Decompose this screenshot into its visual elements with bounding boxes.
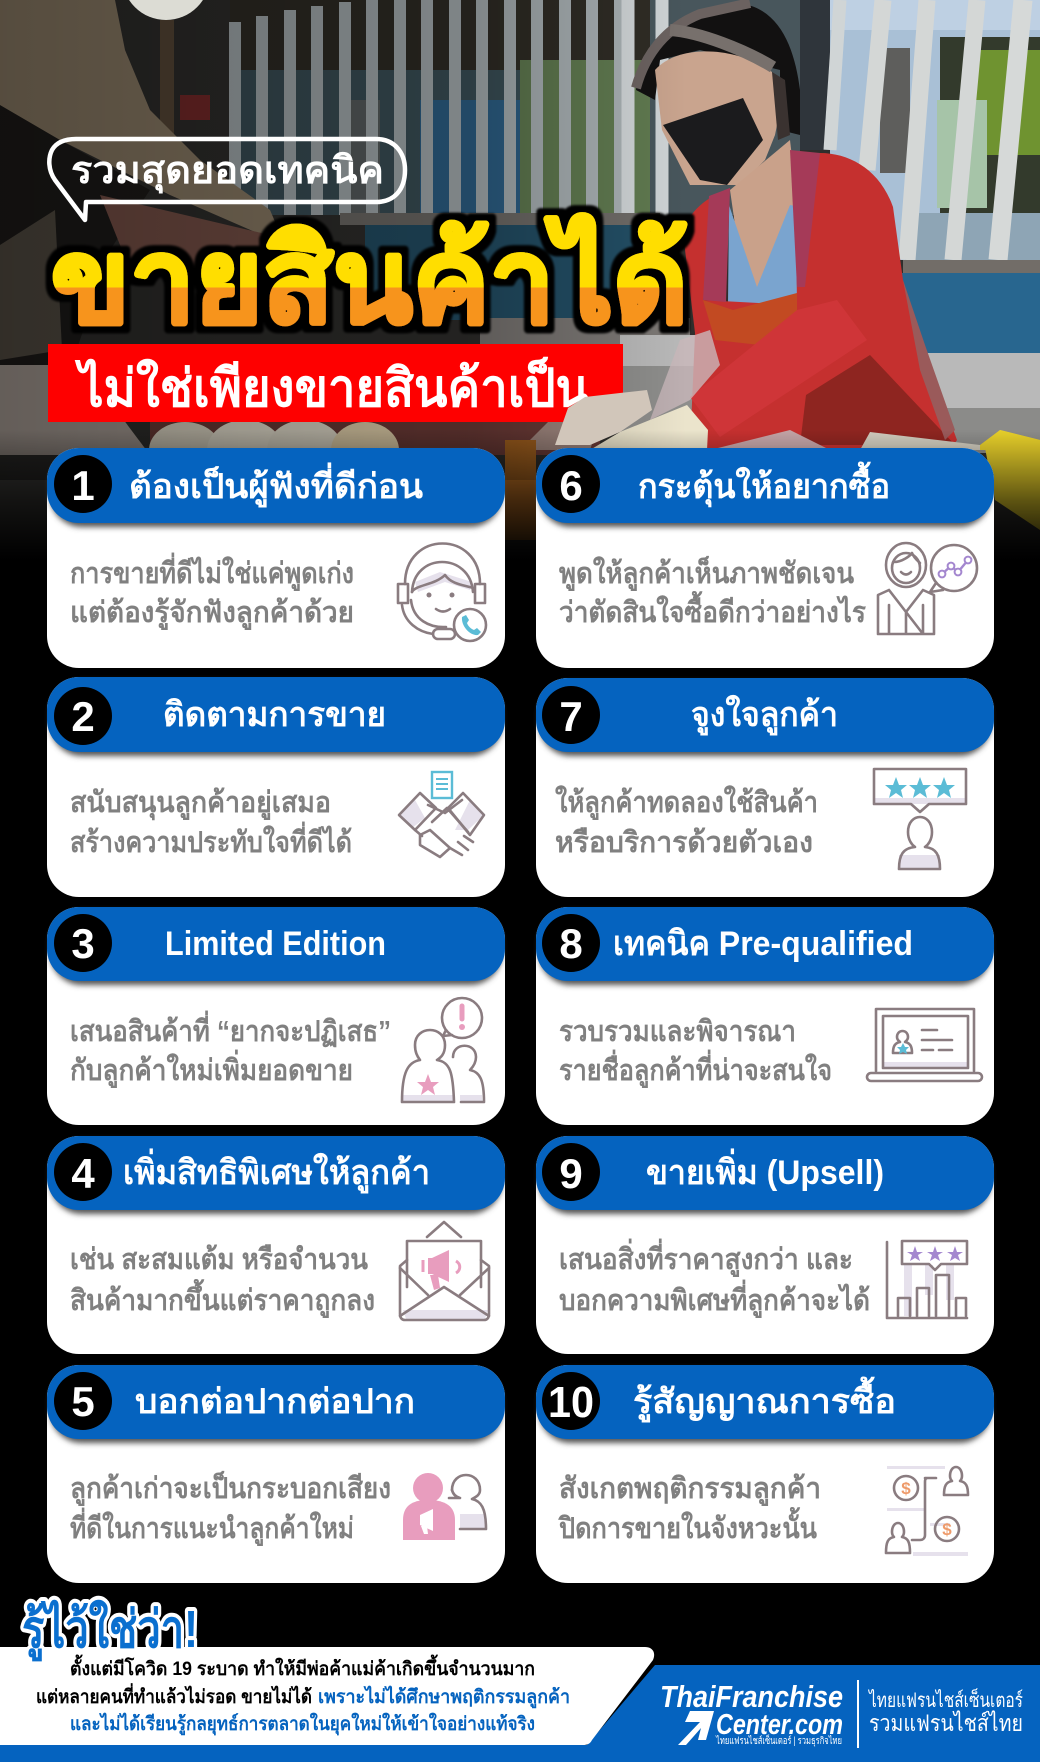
card 9: ขายเพิ่ม (Upsell): [646, 1148, 884, 1192]
card 4: สินค้ามากขึ้นแต่ราคาถูกลง: [70, 1278, 375, 1318]
card 5: [47, 1365, 505, 1583]
card 7: [536, 678, 994, 897]
card 2: สนับสนุนลูกค้าอยู่เสมอ: [70, 787, 331, 820]
card 9: [536, 1136, 994, 1354]
speech bubble heading: รวมสุดยอดเทคนิค: [71, 150, 384, 194]
card 1: [47, 448, 505, 668]
card 4: เพิ่มสิทธิพิเศษให้ลูกค้า: [123, 1148, 430, 1194]
icon: handshake and document: [399, 772, 484, 857]
icon: word of mouth people: [403, 1473, 486, 1540]
card 5: 5: [71, 1378, 95, 1425]
card 1: ต้องเป็นผู้ฟังที่ดีก่อน: [129, 462, 423, 508]
hat and left figure: [0, 0, 295, 370]
icon: customers and money flow: $: [942, 1520, 952, 1539]
card 1: แต่ต้องรู้จักฟังลูกค้าด้วย: [70, 597, 354, 630]
card 1: 1: [71, 462, 95, 509]
card 2: [47, 677, 505, 897]
card 3: เสนอสินค้าที่ “ยากจะปฏิเสธ”: [70, 1010, 391, 1048]
main title: ขายสินค้าได้: [51, 214, 688, 348]
card 5: บอกต่อปากต่อปาก: [135, 1383, 415, 1421]
card 10: รู้สัญญาณการซื้อ: [633, 1376, 896, 1423]
icon: presenter with chart bubble: [878, 543, 977, 634]
card 7: จูงใจลูกค้า: [691, 694, 838, 736]
vendor glove over banner: [555, 390, 652, 445]
card 2: 2: [71, 693, 95, 740]
icon: logo arrow: [678, 1711, 714, 1745]
did-you-know body text: [36, 1654, 570, 1736]
fence slats: [235, 0, 620, 215]
card 10: [536, 1365, 994, 1583]
overlays: [0, 0, 1040, 480]
woman: [520, 3, 1040, 450]
icon: call centre agent: [398, 544, 486, 641]
card 9: บอกความพิเศษที่ลูกค้าจะได้: [559, 1279, 870, 1318]
icon: laptop with customer profile: [867, 1009, 982, 1081]
card 7: 7: [559, 693, 583, 740]
logo ThaiFranchise Center.com: ไทยแฟรนไชส์เซ็นเตอร์ | รวมธุรกิจไทย: [715, 1733, 842, 1747]
card 7: ให้ลูกค้าทดลองใช้สินค้า: [555, 785, 818, 820]
logo ThaiFranchise Center.com: [660, 1679, 843, 1747]
fence backdrop: [160, 0, 1040, 260]
footer tagline: [867, 1687, 1023, 1736]
icon: customers with alert: [402, 998, 484, 1102]
card 3: [47, 907, 505, 1125]
did-you-know body text: แต่หลายคนที่ทำแล้วไม่รอด ขายไม่ได้: [36, 1683, 312, 1708]
footer blue band: [0, 1665, 1040, 1762]
card 6: กระตุ้นให้อยากซื้อ: [638, 461, 890, 508]
icon: envelope with megaphone: [400, 1222, 489, 1320]
card 5: ลูกค้าเก่าจะเป็นกระบอกเสียง: [70, 1470, 391, 1506]
card 8: รายชื่อลูกค้าที่น่าจะสนใจ: [559, 1049, 832, 1088]
card 4: [47, 1136, 505, 1354]
logo ThaiFranchise Center.com: Center.com: [716, 1709, 843, 1741]
card 6: 6: [559, 462, 583, 509]
speech bubble heading: [49, 139, 405, 220]
card 9: เสนอสิ่งที่ราคาสูงกว่า และ: [559, 1238, 853, 1277]
card 7: หรือบริการด้วยตัวเอง: [555, 827, 813, 859]
card 8: [536, 907, 994, 1125]
card 8: 8: [559, 920, 583, 967]
icon: rating bubble and person: [874, 769, 966, 869]
card 3: Limited Edition: [165, 925, 386, 963]
icon: customers and money flow: [886, 1466, 968, 1556]
icon: rating over bar chart: [887, 1241, 967, 1318]
card 6: ว่าตัดสินใจซื้อดีกว่าอย่างไร: [559, 590, 866, 629]
card 3: 3: [71, 920, 95, 967]
card 10: ปิดการขายในจังหวะนั้น: [558, 1506, 817, 1545]
card 8: เทคนิค Pre-qualified: [613, 925, 913, 963]
did-you-know heading: รู้ไว้ใช่ว่า!: [22, 1599, 198, 1662]
card 10: สังเกตพฤติกรรมลูกค้า: [559, 1473, 821, 1506]
card 2: สร้างความประทับใจที่ดีได้: [70, 821, 352, 859]
did-you-know body text: ตั้งแต่มีโควิด 19 ระบาด ทำให้มีพ่อค้าแม่ค้าเกิดขึ้นจำนวนมาก: [70, 1654, 535, 1680]
card 10: 10: [548, 1378, 594, 1427]
card 6: พูดให้ลูกค้าเห็นภาพชัดเจน: [559, 555, 854, 591]
card 4: 4: [71, 1150, 95, 1197]
did-you-know body text: เพราะไม่ได้ศึกษาพฤติกรรมลูกค้า: [318, 1685, 570, 1709]
card 4: เช่น สะสมแต้ม หรือจำนวน: [70, 1244, 368, 1276]
wall: [340, 213, 1040, 453]
card 8: รวบรวมและพิจารณา: [559, 1016, 796, 1048]
icon: customers and money flow: $: [901, 1479, 911, 1498]
card 6: [536, 448, 994, 668]
red subtitle banner: ไม่ใช่เพียงขายสินค้าเป็น: [74, 357, 589, 418]
logo ThaiFranchise Center.com: ThaiFranchise: [660, 1679, 843, 1714]
did-you-know body text: และไม่ได้เรียนรู้กลยุทธ์การตลาดในยุคใหม่ให้เข้าใจอย่างแท้จริง: [70, 1712, 535, 1736]
card 9: 9: [559, 1150, 583, 1197]
fruit on table: [0, 365, 600, 480]
did-you-know panel: [0, 1599, 654, 1745]
card 5: ที่ดีในการแนะนำลูกค้าใหม่: [70, 1507, 354, 1546]
card 3: กับลูกค้าใหม่เพิ่มยอดขาย: [70, 1049, 353, 1088]
card 2: ติดตามการขาย: [163, 696, 386, 734]
card 1: การขายที่ดีไม่ใช่แค่พูดเก่ง: [70, 552, 354, 591]
